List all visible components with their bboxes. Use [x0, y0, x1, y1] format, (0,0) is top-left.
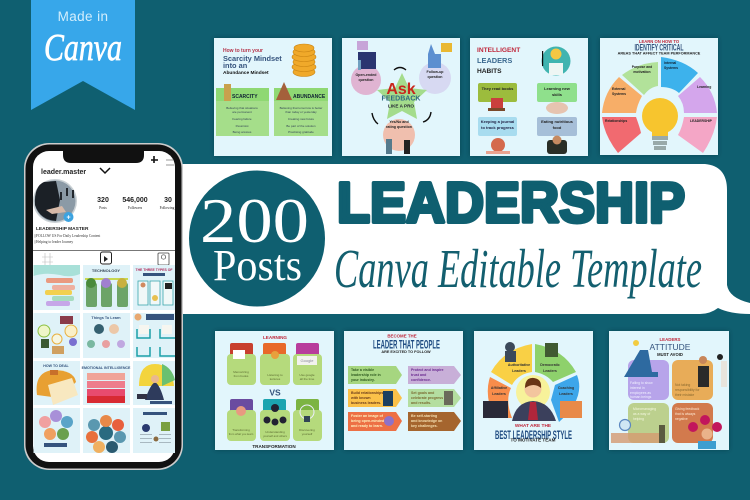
heading: best leadership style: WHAT ARE THE — [515, 423, 552, 429]
phone mockup — [24, 143, 183, 470]
habit: eating nutritious food — [537, 117, 577, 154]
tile: transforming: Transforming — [232, 428, 250, 432]
post 5: Things To Learn — [91, 316, 121, 320]
bubble: open-ended question: question — [359, 78, 373, 82]
segment: learning: Learning — [697, 85, 711, 89]
card: identify critical areas: LEARN ON HOW TO — [639, 39, 680, 44]
group: team icons — [483, 342, 582, 418]
card: leaders attitude: MUST AVOID — [657, 352, 683, 357]
card: best leadership style: Leaders — [543, 369, 557, 373]
card: best leadership style: Leaders — [512, 369, 526, 373]
tag: self-starting: key challenges. — [411, 424, 438, 428]
card: ask feedback — [342, 38, 460, 156]
profile bio: ▯Helping to leader Journey — [34, 240, 73, 244]
card: identify critical areas: IDENTIFY CRITICAL — [634, 42, 684, 52]
profile stats: Followers — [128, 206, 143, 210]
tile: giving feedback: that is always — [675, 412, 696, 416]
segment: internal systems: Internal — [664, 61, 676, 65]
card: intelligent leaders habits: INTELLIGENT — [477, 47, 520, 54]
profile stats: 320 — [97, 197, 109, 204]
panel: scarcity: are permanent — [232, 110, 252, 114]
profile stats: Following — [160, 206, 175, 210]
habit: learning new skills — [537, 83, 577, 114]
tag: goals: Set goals and — [411, 391, 434, 395]
panel: abundance: ABUNDANCE — [293, 94, 326, 100]
tile: not taking responsibility: Not taking — [675, 383, 690, 387]
tag: goals: celebrate progress — [411, 396, 443, 400]
tag: image — [348, 412, 402, 431]
habit: they read books: They read books — [482, 86, 514, 91]
tag: relationships — [348, 389, 402, 407]
post grid — [34, 265, 175, 453]
card: scarcity mindset — [214, 38, 332, 156]
panel: abundance: Creating new future — [288, 117, 314, 121]
panel: abundance — [274, 82, 328, 136]
profile bio: ▯FOLLOW US For Daily Leadership Content — [34, 234, 100, 238]
tile: not taking responsibility: responsibility for — [675, 388, 700, 392]
card: leaders attitude — [609, 331, 729, 450]
tile: growth: yourself — [302, 432, 312, 436]
tag: relationships: business leaders. — [351, 401, 381, 405]
tile: failing to show — [628, 360, 669, 400]
post 10 — [39, 410, 73, 447]
badge: 200 Posts: Posts — [213, 241, 302, 290]
panel: abundance: Practising gratitude — [288, 130, 314, 134]
heading: ask feedback: Ask — [386, 81, 416, 98]
tile: growth — [293, 399, 322, 441]
card: best leadership style: Affiliative — [491, 386, 507, 390]
tile: mesmerizing: Memorizing — [233, 370, 249, 374]
heading: ask feedback: FEEDBACK — [382, 96, 420, 102]
post 4 — [38, 316, 77, 354]
banner: speech bubble — [170, 164, 750, 314]
card: learning vs transformation — [215, 331, 334, 450]
post 7: HOW TO DEAL — [43, 364, 70, 368]
panel: scarcity: Believing that situations — [226, 106, 258, 110]
segment: purpose and motivation: Purpose and — [632, 65, 652, 69]
segment: authoritative leaders — [491, 344, 532, 385]
post 1 — [34, 265, 80, 306]
notch — [63, 149, 144, 163]
post 8: EMOTIONAL INTELLIGENCE — [82, 366, 131, 370]
tile: understanding — [260, 399, 290, 441]
top bar: leader.master — [41, 169, 86, 176]
tag: visible: Take a visible — [351, 368, 374, 372]
habit: eating nutritious food: Eating nutritious — [541, 119, 574, 124]
heading: best leadership style: TO MOTIVATE TEAM — [511, 438, 556, 442]
card: learning vs transformation: LEARNING — [263, 335, 287, 340]
bubble: follow-up question — [419, 43, 452, 94]
post 11 — [86, 415, 126, 453]
ribbon: Made in Canva — [31, 0, 135, 110]
card: best leadership style: Leaders — [492, 392, 506, 396]
tile: not taking responsibility — [672, 360, 713, 400]
segment: external systems: External — [612, 87, 625, 91]
icon: light bulb — [542, 46, 570, 76]
segment: external systems: Systems — [612, 92, 626, 96]
tile: giving feedback: Giving feedback — [675, 407, 700, 411]
card: best leadership style: Coaching — [558, 386, 574, 390]
tile: mesmerizing: from books — [234, 374, 249, 378]
card: intelligent leaders habits: LEADERS — [477, 56, 512, 65]
post 12 — [140, 412, 171, 443]
segment: affiliative leaders — [488, 377, 512, 418]
habit: learning new skills: Learning new — [544, 86, 571, 91]
card: scarcity mindset: How to turn your — [223, 48, 263, 54]
panel: scarcity — [216, 84, 269, 136]
card: intelligent leaders habits: HABITS — [477, 68, 502, 75]
segment: relationships: Relationships — [605, 119, 627, 123]
tile: failing to show: interest in — [630, 386, 645, 390]
profile bio: LEADERSHIP MASTER — [36, 226, 89, 232]
icon: big light bulb — [642, 98, 678, 150]
post 5 — [87, 316, 125, 348]
tag: image: being open-minded — [351, 419, 384, 423]
avatar — [33, 179, 77, 223]
tag: visible — [348, 366, 402, 384]
panel: scarcity: Fearing failure — [232, 117, 252, 121]
tile: understanding: yourself and others — [263, 434, 287, 438]
tile: google: all the time — [300, 377, 315, 381]
card: learning vs transformation: TRANSFORMATION — [252, 444, 296, 449]
panel: scarcity: Pessimist — [236, 124, 249, 128]
post 2: TECHNOLOGY — [92, 268, 120, 273]
card: scarcity mindset: into an — [223, 61, 248, 70]
top bar — [41, 156, 174, 176]
tag: goals: and results. — [411, 401, 431, 405]
tag: self-starting — [408, 412, 461, 431]
tile: listening: lectures — [270, 377, 281, 381]
profile stats: 30 — [164, 197, 172, 204]
tag: self-starting: Be self-starting — [411, 414, 437, 418]
tag: goals — [408, 389, 461, 407]
figures and icons — [611, 340, 727, 449]
card: leader that people: LEADER THAT PEOPLE — [373, 338, 440, 352]
bubble: yes/no and rating question — [383, 119, 415, 154]
tile: growth: Discovering — [299, 428, 315, 432]
card: scarcity mindset: Abundance Mindset — [223, 70, 269, 76]
habit: keeping a journal — [478, 117, 517, 154]
bubble: follow-up question: question — [428, 75, 442, 79]
tag: relationships: Build relationships — [351, 391, 383, 395]
habit: keeping a journal: to track progress — [481, 125, 515, 130]
tag: relationships: with known — [350, 396, 371, 400]
tile: transforming: from what you learn — [229, 432, 254, 436]
panel: abundance: Believing that tomorrow is better — [280, 106, 322, 110]
post 9 — [137, 364, 175, 404]
tag: self-starting: and knowledge on — [411, 419, 442, 423]
card: identify critical areas: AREAS THAT AFFECT TEAM PERFORMANCE — [618, 52, 701, 56]
profile stats — [97, 197, 175, 210]
tag: protect: confidence. — [411, 378, 431, 382]
post 3: THE THREE TYPES OF — [136, 268, 172, 272]
profile bio — [34, 226, 100, 244]
tile: google: Google — [301, 358, 314, 363]
tag: visible: leadership role in — [351, 373, 381, 377]
tag: protect: Protect and inspire — [411, 368, 444, 372]
ribbon: Made in Canva: Made in — [58, 9, 108, 24]
badge: 200 Posts — [189, 170, 325, 306]
card: leader that people: BECOME THE — [387, 334, 417, 338]
panel: scarcity: SCARCITY — [232, 94, 258, 100]
habit: eating nutritious food: food — [553, 125, 562, 130]
post 3 — [136, 268, 173, 305]
post 8 — [82, 366, 131, 403]
segment: internal systems: Systems — [664, 66, 678, 70]
tile: micromanaging: Micromanaging — [633, 407, 656, 411]
profile stats: Posts — [99, 206, 107, 210]
segment: leadership: LEADERSHIP — [690, 119, 713, 123]
heading: ask feedback — [382, 81, 420, 108]
tile: micromanaging: as a way of — [633, 412, 650, 416]
tab icons — [33, 250, 175, 266]
tile: failing to show: Failing to show — [630, 381, 653, 385]
tag: visible: your industry. — [351, 378, 375, 382]
segment: purpose and motivation — [622, 62, 658, 95]
profile stats: 546,000 — [122, 197, 148, 204]
tag: protect — [408, 366, 461, 384]
tile: google: Use google — [299, 373, 315, 377]
tile: failing to show: employees as — [630, 391, 651, 395]
tile: micromanaging — [628, 403, 669, 443]
tile: giving feedback: negative — [675, 417, 688, 421]
card: leaders attitude: ATTITUDE — [650, 342, 691, 352]
tile: giving feedback — [672, 403, 713, 443]
bubble: follow-up question: Follow-up — [427, 70, 444, 74]
panel: abundance: Be part of the solution — [286, 124, 316, 128]
segment: coaching leaders — [551, 375, 579, 422]
card: best leadership style: Democratic — [540, 363, 560, 367]
habit: keeping a journal: Keeping a journal — [481, 119, 514, 124]
tag: image: and ready to learn. — [351, 424, 383, 428]
card: best leadership style: BEST LEADERSHIP STYLE — [495, 428, 572, 442]
tile: mesmerizing — [227, 343, 256, 385]
panel: abundance: than today or yesterday — [285, 110, 317, 114]
tile: understanding: Understanding — [265, 430, 285, 434]
card: leaders attitude: LEADERS — [660, 337, 681, 342]
heading: best leadership style — [495, 423, 572, 442]
arrows: cycle — [372, 68, 431, 124]
tile: micromanaging: helping — [633, 417, 644, 421]
icon: coin stack — [292, 44, 316, 76]
tag: image: Foster an image of — [351, 414, 384, 418]
card: leader that people: ARE EXCITED TO FOLLOW — [381, 350, 431, 354]
bubble: open-ended question — [351, 41, 381, 95]
segment: democratic leaders — [535, 344, 576, 382]
card: best leadership style: Authoritative — [508, 363, 530, 367]
card: identify critical areas — [600, 38, 718, 155]
post 7 — [37, 364, 78, 405]
ribbon: Made in Canva: Canva — [44, 27, 122, 69]
label: VS: VS — [269, 388, 281, 398]
panel: scarcity: Being anxious — [233, 130, 252, 134]
tile: listening — [260, 343, 290, 385]
tag: protect: trust and — [411, 373, 426, 377]
segment: external systems — [602, 77, 642, 113]
icon: star — [377, 73, 427, 119]
heading: ask feedback: LIKE A PRO — [388, 104, 414, 108]
segment: internal systems — [661, 57, 698, 93]
card: scarcity mindset: Scarcity Mindset — [223, 54, 282, 63]
bubble: yes/no and rating question: rating question — [386, 125, 412, 129]
tile: not taking responsibility: their mistake — [675, 393, 694, 397]
heading: LEADERSHIP: LEADERSHIP — [337, 171, 685, 235]
center circle with leader — [512, 375, 556, 421]
segment: purpose and motivation: motivation — [633, 70, 651, 74]
habit: learning new skills: skills — [552, 92, 563, 97]
avatar: + — [66, 214, 71, 222]
tile: google — [293, 343, 322, 385]
tile: failing to show: human beings — [630, 395, 652, 399]
card: best leadership style: Leaders — [559, 392, 573, 396]
post 2 — [85, 268, 128, 307]
bubble: yes/no and rating question: Yes/No and — [389, 120, 409, 124]
card: intelligent leaders habits — [470, 38, 588, 156]
card: best leadership style — [474, 331, 593, 450]
post 6 — [134, 314, 175, 356]
bubble: open-ended question: Open-ended — [356, 73, 376, 77]
tile: transforming — [227, 399, 256, 441]
tile: listening: Listening to — [267, 373, 283, 377]
card: leader that people — [344, 331, 463, 450]
badge: 200 Posts: 200 — [200, 185, 309, 256]
